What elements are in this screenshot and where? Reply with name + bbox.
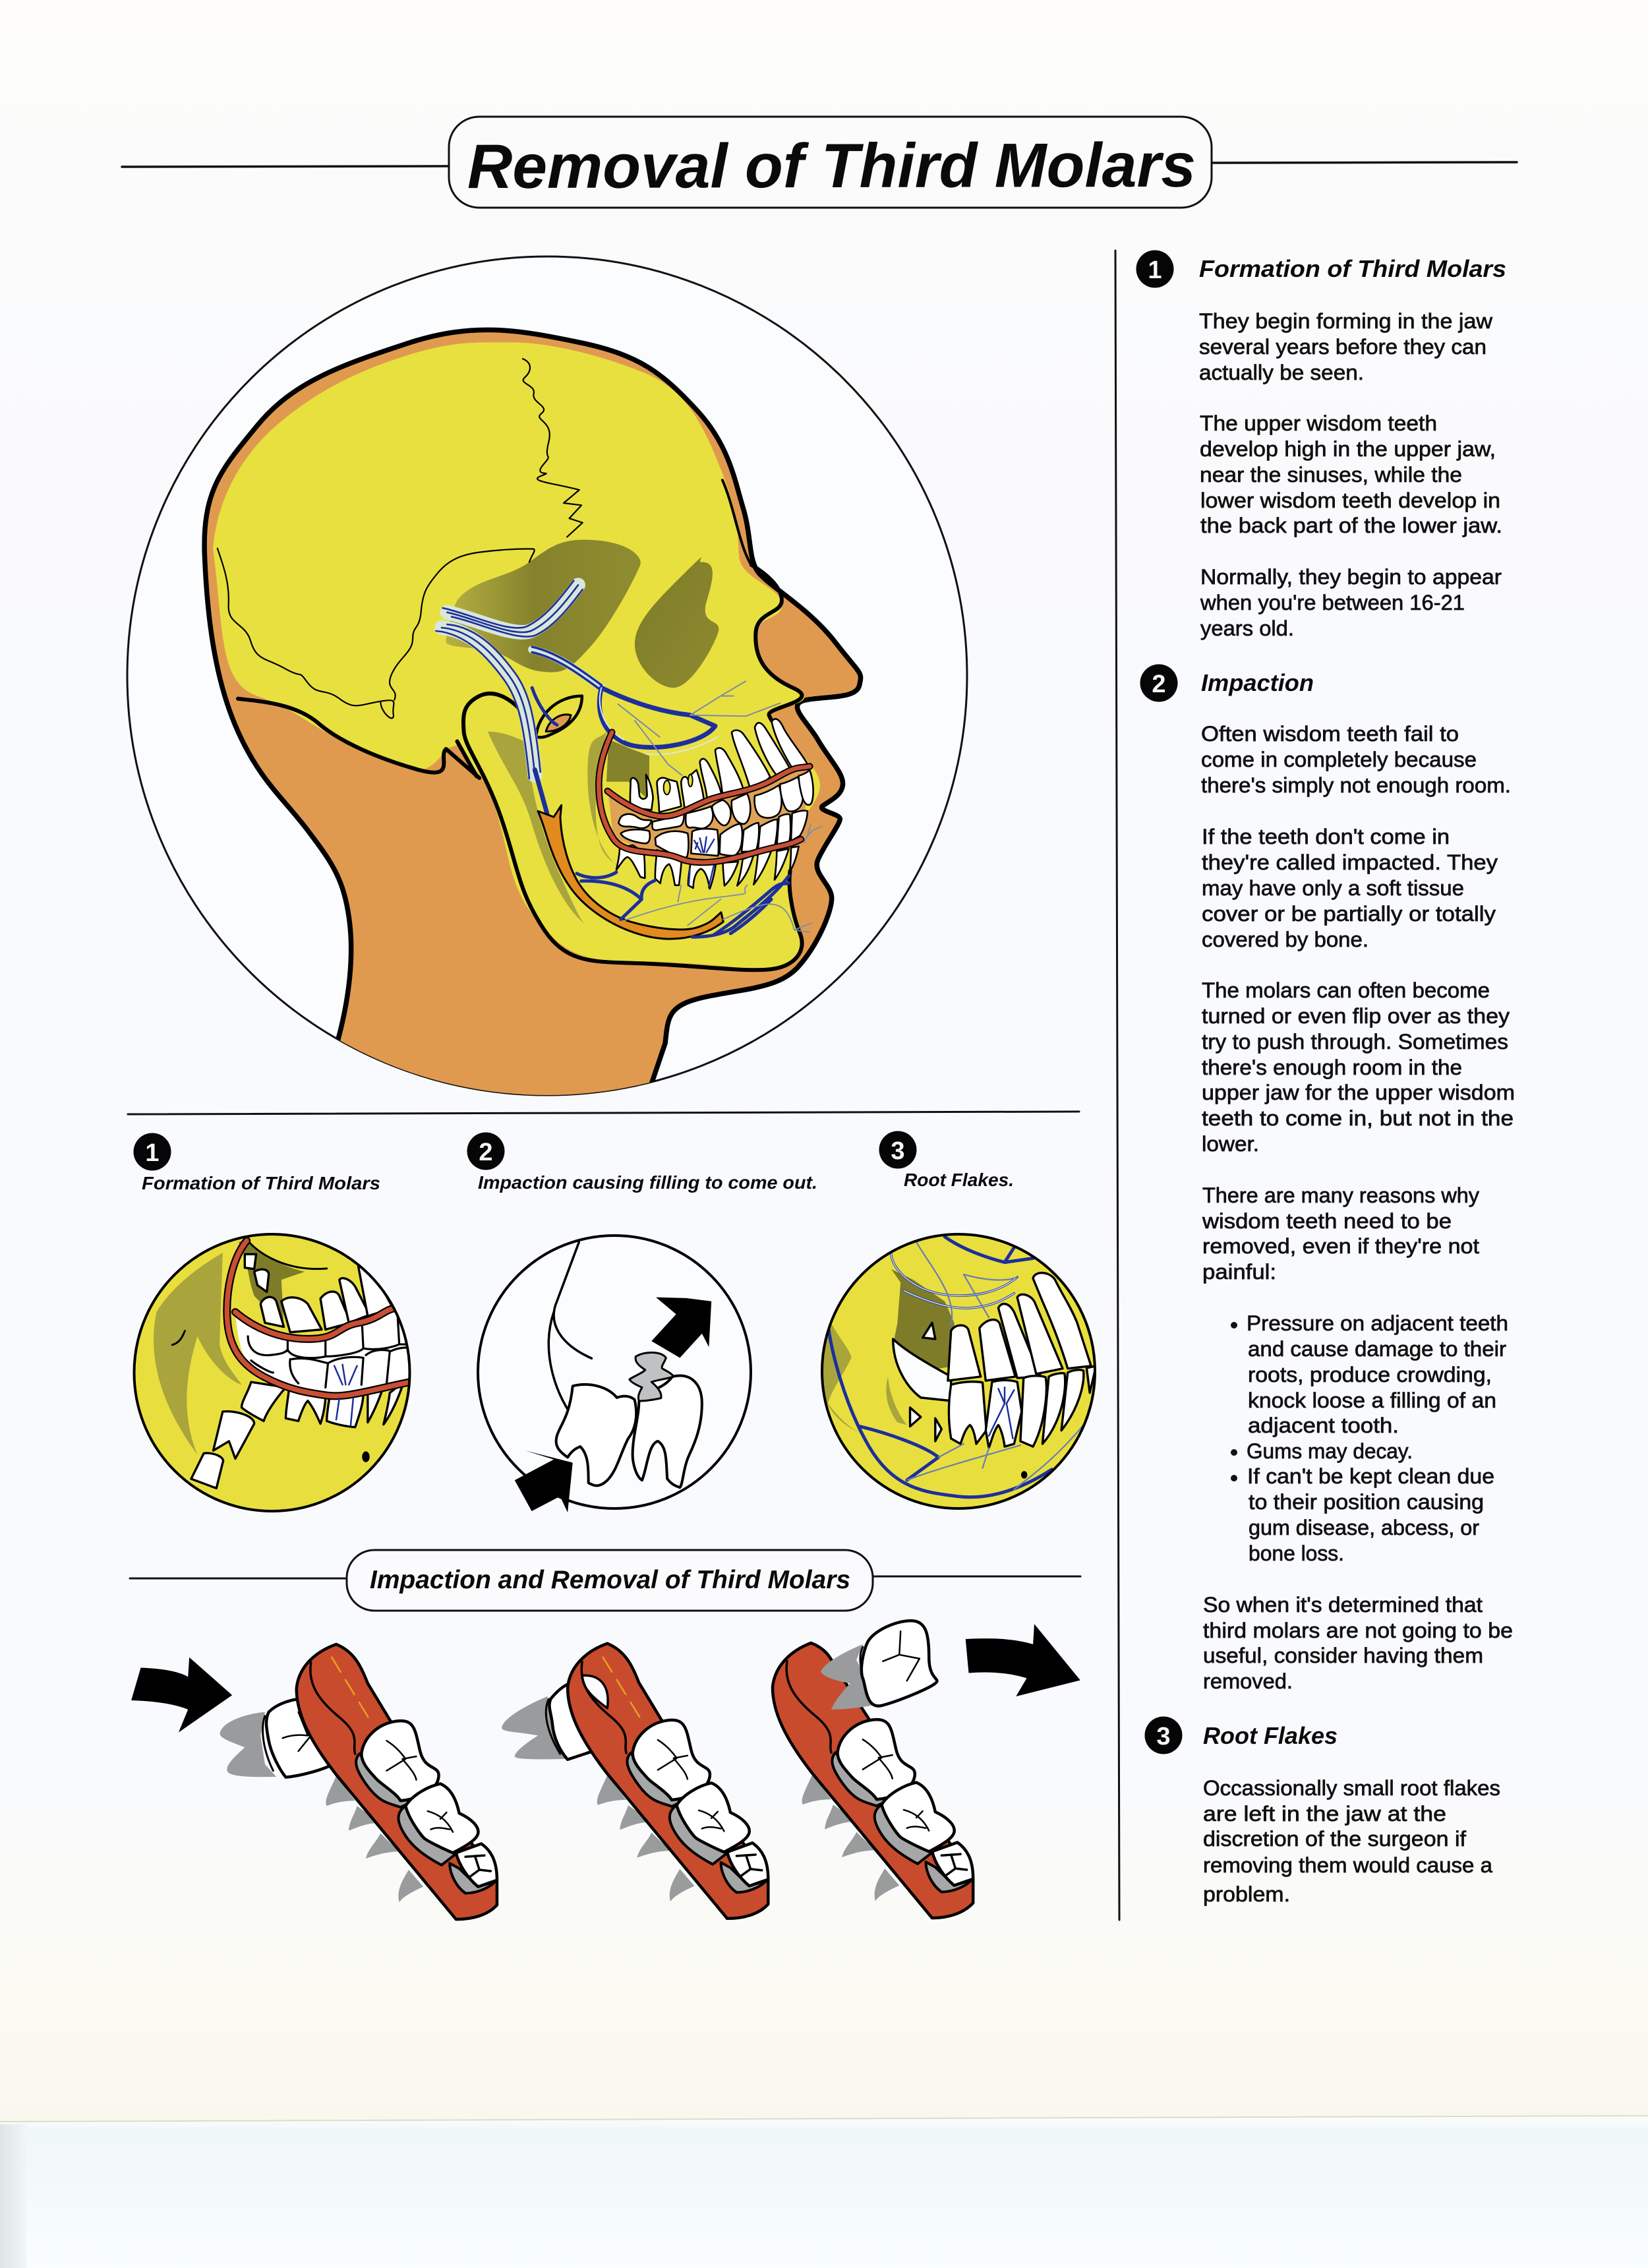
- section 3 heading: Root Flakes: [1203, 1722, 1338, 1749]
- thick skull base and jaw contours: [238, 480, 802, 970]
- section 2 heading: [1140, 665, 1314, 701]
- section 2 body text: covered by bone.: [1202, 928, 1368, 951]
- column divider: [1115, 251, 1119, 1920]
- section 2 heading: 2: [1152, 671, 1166, 698]
- jaw shading: [488, 732, 585, 924]
- section 2 body text: removed, even if they're not: [1202, 1234, 1479, 1258]
- section 2 body text: painful:: [1202, 1260, 1276, 1284]
- section 1 body text: years old.: [1200, 616, 1294, 640]
- upper teeth roots and lower roots: [191, 1254, 403, 1488]
- temporal fossa shadow: [446, 540, 641, 672]
- bullet list of reasons: [1231, 1311, 1508, 1565]
- section 2 body text: There are many reasons why: [1202, 1183, 1479, 1207]
- section 2 body text: there's simply not enough room.: [1201, 773, 1511, 797]
- section 2 body text: If the teeth don't come in: [1202, 825, 1450, 849]
- section 2 body text: upper jaw for the upper wisdom: [1202, 1081, 1515, 1104]
- bullet list of reasons: Gums may decay.: [1247, 1439, 1413, 1463]
- section 2 body text: cover or be partially or totally: [1202, 902, 1496, 926]
- bullet list of reasons: gum disease, abcess, or: [1249, 1516, 1479, 1539]
- section 2 body text: The molars can often become: [1202, 978, 1490, 1002]
- detail heading 2: [467, 1133, 817, 1193]
- detail heading 2: Impaction causing filling to come out.: [478, 1172, 817, 1193]
- section 2 body text: teeth to come in, but not in the: [1202, 1106, 1514, 1130]
- bullet list of reasons: and cause damage to their: [1248, 1337, 1506, 1361]
- section 1 body text: develop high in the upper jaw,: [1200, 437, 1496, 461]
- detail circle 1: formation: [134, 1234, 415, 1511]
- detail heading 1: 1: [145, 1139, 160, 1167]
- bullet list of reasons: bone loss.: [1249, 1541, 1344, 1565]
- dark shadow behind upper molars: [606, 739, 649, 800]
- main head illustration in circle: [127, 256, 967, 1136]
- section 1 heading: 1: [1148, 256, 1162, 284]
- section 1 body text: near the sinuses, while the: [1200, 463, 1462, 487]
- section 3 heading: 3: [1156, 1723, 1171, 1750]
- section 3 body text: [1203, 1776, 1500, 1906]
- eye orbit: [635, 558, 719, 688]
- bullet list of reasons: roots, produce crowding,: [1248, 1363, 1492, 1387]
- left molar: [556, 1385, 636, 1485]
- section 1 body text: The upper wisdom teeth: [1200, 411, 1437, 435]
- closing paragraph of section 2: [1203, 1593, 1513, 1693]
- jaw figure 2: flap raised: [502, 1644, 768, 1919]
- lower nerve branches: [577, 824, 822, 937]
- bone shading: [154, 1253, 242, 1454]
- detail heading 1: [133, 1133, 380, 1193]
- section 1 body text: several years before they can: [1199, 335, 1486, 359]
- section 2 body text: lower.: [1202, 1132, 1259, 1156]
- section 1 body text: [1199, 309, 1502, 640]
- section 2 body text: try to push through. Sometimes: [1202, 1030, 1508, 1054]
- section 1 heading: [1136, 251, 1506, 287]
- detail circle 2: filling displaced: [478, 1236, 751, 1512]
- lower sheet below the page fold: [0, 2115, 1648, 2268]
- section 3 body text: problem.: [1203, 1882, 1290, 1906]
- upper teeth roots: [630, 719, 808, 812]
- root canals in upper molars: [664, 775, 693, 794]
- section 1 body text: Normally, they begin to appear: [1200, 565, 1502, 589]
- section 1 body text: lower wisdom teeth develop in: [1200, 489, 1500, 512]
- section 3 body text: discretion of the surgeon if: [1203, 1827, 1466, 1851]
- closing paragraph of section 2: third molars are not going to be: [1203, 1619, 1513, 1642]
- section 1 body text: They begin forming in the jaw: [1199, 309, 1493, 333]
- title banner: [122, 117, 1517, 208]
- bullet list of reasons: If can't be kept clean due: [1247, 1464, 1494, 1488]
- section 1 body text: actually be seen.: [1199, 361, 1364, 384]
- lower teeth crowns: [621, 811, 808, 858]
- closing paragraph of section 2: useful, consider having them: [1203, 1644, 1483, 1667]
- bullet list of reasons: adjacent tooth.: [1248, 1414, 1399, 1437]
- tooth crowns between gums: [235, 1307, 415, 1396]
- lower teeth roots: [616, 845, 799, 889]
- section 3 body text: removing them would cause a: [1203, 1853, 1492, 1877]
- section 1 body text: the back part of the lower jaw.: [1200, 514, 1502, 537]
- detail heading 3: [879, 1131, 1014, 1190]
- gum lines: [599, 732, 809, 862]
- closing paragraph of section 2: So when it's determined that: [1203, 1593, 1483, 1617]
- skull sutures: [218, 359, 583, 718]
- arrow: up right: [651, 1298, 711, 1358]
- section 2 body text: Often wisdom teeth fail to: [1201, 722, 1459, 746]
- section 2 heading: Impaction: [1201, 669, 1314, 696]
- teeth: [910, 1273, 1096, 1448]
- bullet list of reasons: Pressure on adjacent teeth: [1247, 1311, 1508, 1335]
- filling coming out: [630, 1353, 674, 1401]
- arrow: into jaw: [131, 1657, 232, 1733]
- bullet list of reasons: knock loose a filling of an: [1248, 1388, 1496, 1412]
- right molar: [633, 1376, 702, 1487]
- arrow: up from below: [515, 1450, 573, 1512]
- detail heading 1: Formation of Third Molars: [142, 1173, 380, 1193]
- section 3 heading: [1144, 1717, 1338, 1754]
- jaw figure 1: impacted molar: [220, 1644, 497, 1919]
- section 2 body text: there's enough room in the: [1202, 1056, 1462, 1079]
- detail heading 3: Root Flakes.: [904, 1170, 1014, 1190]
- tooth nerve detail: [689, 837, 714, 887]
- sub-heading banner: Impaction and Removal of Third Molars: [370, 1566, 850, 1594]
- arrow: out of jaw: [966, 1624, 1080, 1696]
- skull bone: [213, 342, 820, 970]
- divider above details: [128, 1112, 1079, 1114]
- jaw figure 3: tooth removed: [773, 1621, 973, 1918]
- nerve network: [828, 1237, 1084, 1497]
- tissue between tooth rows: [608, 766, 809, 858]
- section 2 body text: come in completely because: [1201, 748, 1477, 771]
- jaw joint socket: [536, 696, 582, 737]
- gum bands: [227, 1241, 410, 1396]
- section 1 body text: when you're between 16-21: [1200, 591, 1465, 614]
- section 2 body text: they're called impacted. They: [1202, 850, 1498, 874]
- upper teeth crowns: [618, 770, 813, 830]
- section 2 body text: wisdom teeth need to be: [1202, 1209, 1452, 1233]
- section 2 body text: turned or even flip over as they: [1202, 1004, 1510, 1028]
- section 2 body text: [1201, 722, 1515, 1284]
- detail circle 3: root flakes: [822, 1234, 1096, 1508]
- bullet list of reasons: to their position causing: [1249, 1490, 1484, 1514]
- trigeminal nerve: [436, 581, 780, 814]
- detail heading 3: 3: [891, 1137, 905, 1165]
- closing paragraph of section 2: removed.: [1203, 1669, 1293, 1693]
- section 3 body text: Occassionally small root flakes: [1203, 1776, 1500, 1800]
- mandibular canal: [538, 805, 723, 939]
- section 3 body text: are left in the jaw at the: [1203, 1802, 1446, 1826]
- section 1 heading: Formation of Third Molars: [1199, 255, 1506, 282]
- detail heading 2: 2: [479, 1139, 493, 1166]
- head silhouette: [204, 330, 861, 1136]
- title banner: Removal of Third Molars: [467, 131, 1196, 202]
- sub-heading banner: [130, 1550, 1080, 1611]
- section 2 body text: may have only a soft tissue: [1202, 876, 1464, 900]
